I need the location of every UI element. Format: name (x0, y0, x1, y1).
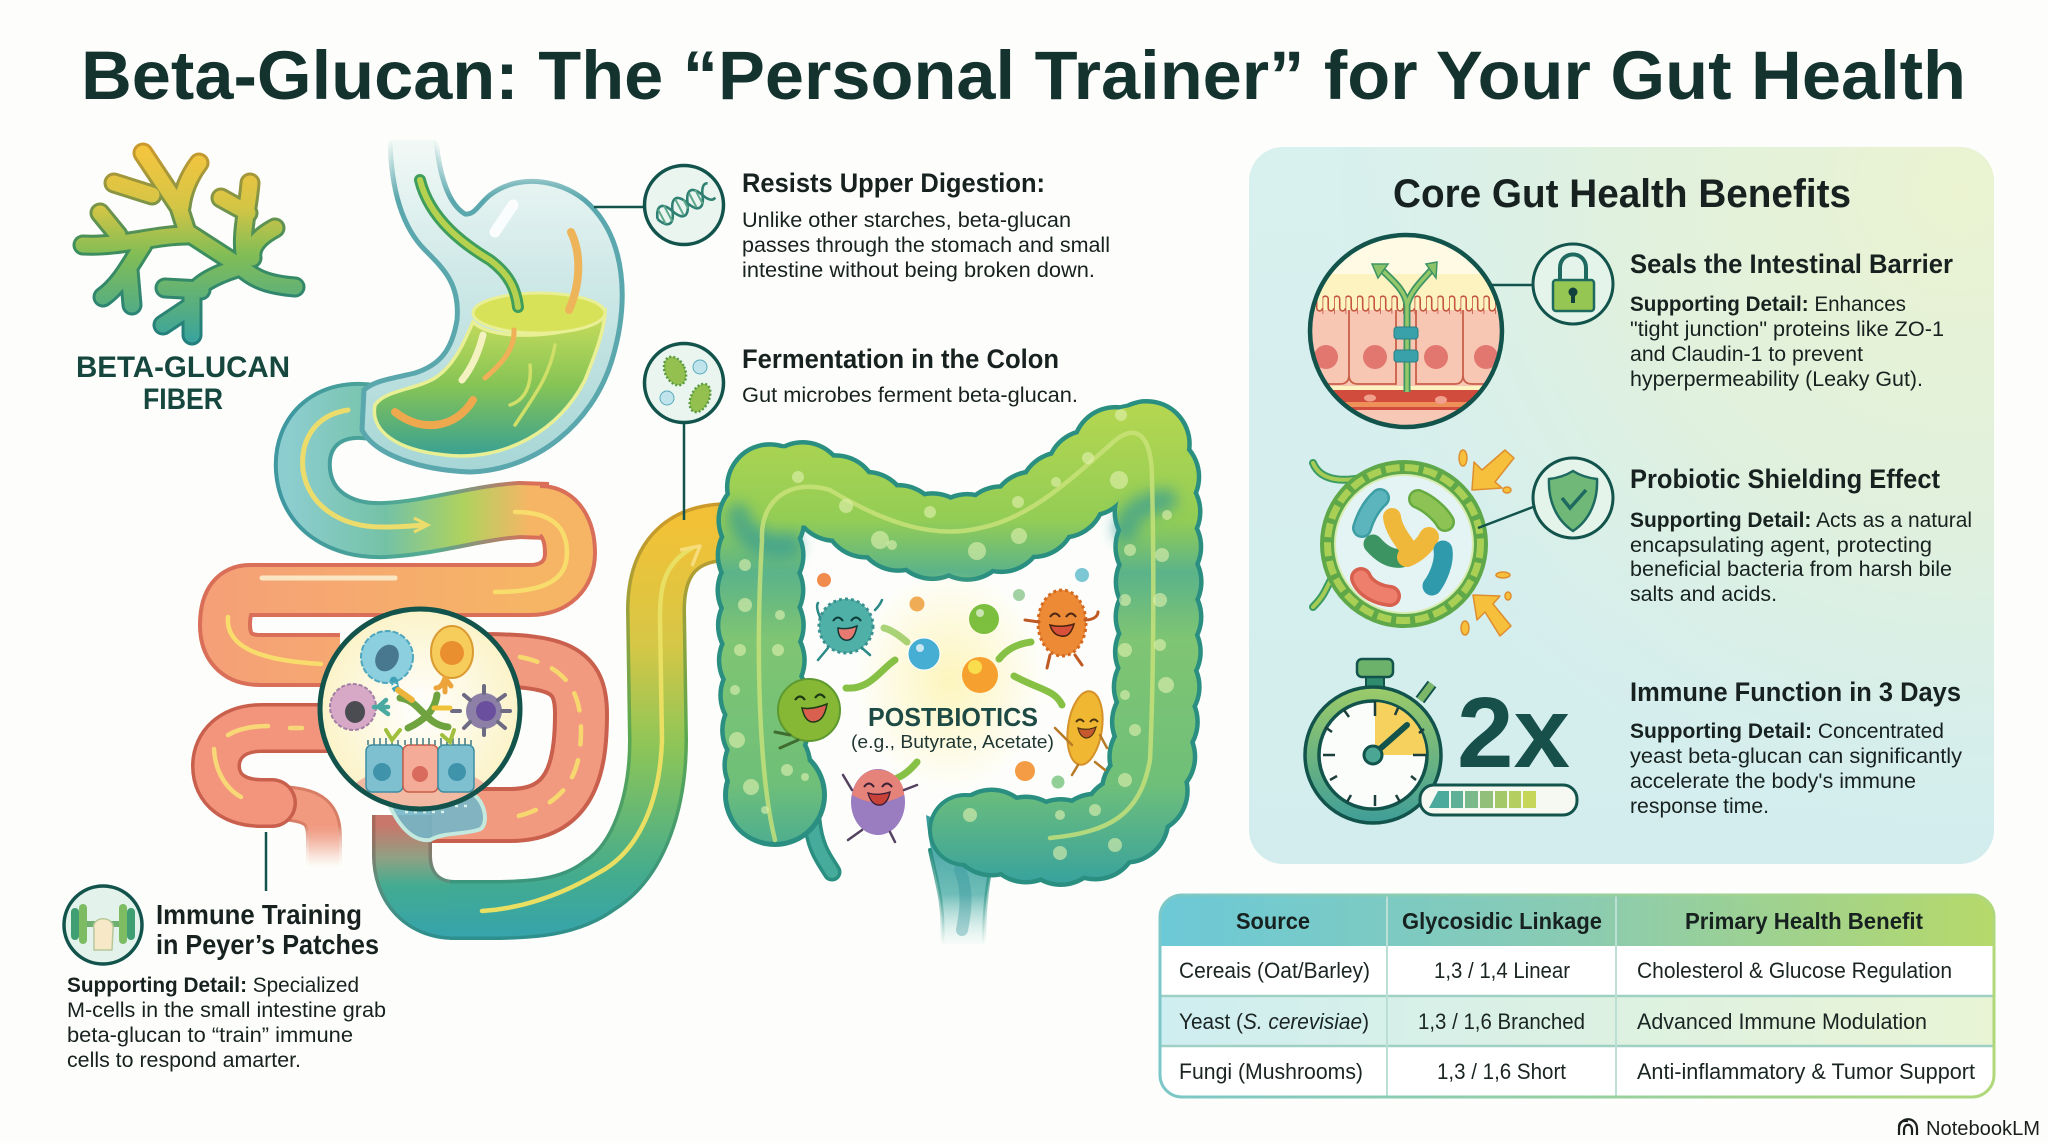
big number 2x: 2x (1457, 677, 1570, 789)
stomach (362, 140, 622, 472)
icon: DNA (644, 166, 724, 244)
colon body (723, 409, 1174, 860)
benefit: stopwatch 2x (1305, 659, 1577, 823)
terminal ileum brown start (402, 815, 455, 910)
yellow-green ascending tube (450, 532, 730, 911)
panel heading: Core Gut Health Benefits (1393, 172, 1851, 216)
microbe: orange (1025, 590, 1098, 668)
text: intestine without being broken down. (742, 259, 1095, 282)
heading: Immune Training (156, 899, 362, 930)
row: fungi: Fungi (Mushrooms) (1179, 1059, 1363, 1084)
callout: resists upper digestion (594, 166, 1110, 282)
label: postbiotics (851, 702, 1054, 752)
rectum (926, 815, 996, 944)
heading: immune function: Immune Function in 3 Days (1630, 677, 1961, 707)
body: immune function: Supporting Detail: Concentrated (1630, 720, 1944, 743)
row: cereals: Cereais (Oat/Barley) (1179, 958, 1370, 983)
immune cell blue (361, 631, 413, 690)
callout: immune training (64, 832, 386, 1072)
microbe: green (775, 679, 840, 748)
central fiber (386, 690, 454, 742)
body: seals barrier: Supporting Detail: Enhances (1630, 293, 1906, 316)
heading: Resists Upper Digestion: (742, 168, 1045, 198)
body text: beta-glucan to “train” immune (67, 1024, 353, 1047)
row: fungi: 1,3 / 1,6 Short (1437, 1059, 1566, 1084)
lens: immune cells (318, 606, 522, 812)
row: cereals: 1,3 / 1,4 Linear (1434, 958, 1570, 983)
descending fade (272, 803, 324, 868)
row: cereals (1179, 958, 1952, 983)
body text: Supporting Detail: Specialized (67, 974, 359, 997)
large intestine colon (723, 409, 1174, 944)
postbiotics scene (775, 568, 1107, 842)
text (742, 209, 1110, 282)
body: probiotic shielding: salts and acids. (1630, 583, 1777, 606)
benefit: intestinal barrier illustration (1310, 234, 1502, 430)
microbe: yellow (1055, 689, 1107, 775)
mucus patch (388, 790, 485, 840)
heading: seals barrier: Seals the Intestinal Barrier (1630, 249, 1953, 279)
table header: Glycosidic Linkage (1402, 908, 1602, 934)
stomach liquid (374, 313, 605, 456)
stopwatch (1305, 659, 1441, 823)
immune cell purple (452, 686, 510, 735)
duodenum first segment (303, 410, 548, 532)
body text: cells to respond amarter. (67, 1049, 301, 1072)
comparison table (1160, 895, 1994, 1097)
second loops (225, 511, 570, 664)
heading: probiotic shielding: Probiotic Shielding Effect (1630, 464, 1940, 494)
body: seals barrier: and Claudin-1 to prevent (1630, 343, 1863, 366)
body: seals barrier: "tight junction" proteins like ZO-1 (1630, 318, 1944, 341)
benefit: capsule with probiotics (1313, 450, 1514, 636)
label: postbiotics: (e.g., Butyrate, Acetate) (851, 732, 1054, 752)
title: Beta-Glucan: The “Personal Trainer” for Your Gut Health (81, 37, 1966, 114)
row: yeast: 1,3 / 1,6 Branched (1418, 1009, 1585, 1034)
microbe: purple (843, 769, 917, 842)
icon: shield (1533, 458, 1613, 538)
body: probiotic shielding: beneficial bacteria from harsh bile (1630, 558, 1952, 581)
callout: fermentation (644, 344, 1078, 520)
row: fungi: Anti-inflammatory & Tumor Support (1637, 1059, 1975, 1084)
row: yeast (1179, 1009, 1927, 1034)
connector (1492, 284, 1532, 286)
icon: lock (1533, 244, 1613, 324)
body: seals barrier: hyperpermeability (Leaky Gut). (1630, 368, 1923, 391)
connector line (265, 832, 267, 891)
table header: Primary Health Benefit (1685, 908, 1923, 934)
small intestine (214, 410, 730, 911)
progress bar (1420, 785, 1577, 815)
body: immune function: response time. (1630, 795, 1769, 818)
icon: beta-glucan fiber molecule (83, 153, 295, 335)
epithelial cells (366, 738, 474, 792)
row: yeast: Yeast (S. cerevisiae) (1179, 1009, 1369, 1034)
connector (683, 423, 685, 520)
body text (67, 974, 386, 1072)
text: passes through the stomach and small (742, 234, 1110, 257)
body: immune function (1630, 720, 1963, 818)
text: Unlike other starches, beta-glucan (742, 209, 1071, 232)
fiber strands in stomach (395, 180, 578, 425)
row: cereals: Cholesterol & Glucose Regulation (1637, 958, 1952, 983)
appendix (812, 820, 832, 872)
table header: Source (1236, 908, 1310, 934)
heading: in Peyer’s Patches (156, 929, 379, 960)
body: probiotic shielding: Supporting Detail: Acts as a natural (1630, 509, 1972, 532)
text: Gut microbes ferment beta-glucan. (742, 384, 1078, 407)
NotebookLM logo: NotebookLM (1926, 1118, 2040, 1140)
colon bubbles (729, 409, 1174, 860)
fiber strands between microbes (846, 628, 1062, 778)
body: probiotic shielding: encapsulating agent, protecting (1630, 534, 1932, 557)
body: probiotic shielding (1630, 509, 1972, 606)
label: postbiotics: POSTBIOTICS (868, 702, 1038, 732)
immune cell pink (330, 684, 388, 730)
label: beta-glucan fiber: FIBER (143, 383, 223, 416)
immune cell orange (431, 626, 473, 692)
panel: core gut health benefits (1249, 147, 1994, 864)
label: beta-glucan fiber (76, 351, 290, 416)
connector (1478, 507, 1533, 528)
table header (1236, 908, 1923, 934)
body: immune function: accelerate the body's immune (1630, 770, 1916, 793)
body: seals barrier (1630, 293, 1944, 391)
postbiotic balls (817, 568, 1089, 788)
body: immune function: yeast beta-glucan can significantly (1630, 745, 1963, 768)
label: beta-glucan fiber: BETA-GLUCAN (76, 351, 290, 384)
connector (594, 206, 644, 208)
heading (156, 899, 379, 960)
row: yeast: Advanced Immune Modulation (1637, 1009, 1927, 1034)
right loop (430, 657, 581, 818)
arrows (1459, 450, 1514, 636)
icon: dumbbell (64, 886, 142, 964)
icon: microbes (644, 344, 724, 422)
microbe: teal (817, 599, 882, 660)
row: fungi (1179, 1059, 1975, 1084)
third row loop (214, 726, 330, 803)
body text: M-cells in the small intestine grab (67, 999, 386, 1022)
heading: Fermentation in the Colon (742, 344, 1059, 374)
